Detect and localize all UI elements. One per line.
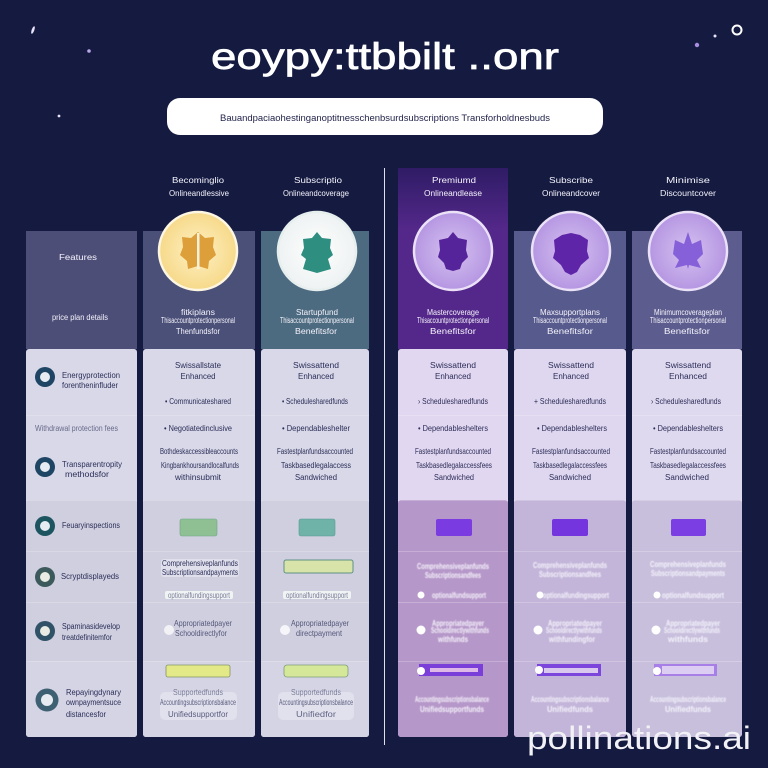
plan description: Thisaccountprotectionpersonal <box>650 316 726 325</box>
feature text: Kingbankhoursandlocalfunds <box>161 461 239 470</box>
feature text: Enhanced <box>298 372 334 381</box>
feature text: Swissattend <box>665 361 711 370</box>
column header band <box>514 231 626 349</box>
bullet note: Appropriatedpayer <box>291 619 349 628</box>
feature text: Enhanced <box>669 372 707 381</box>
soft text block: optionalfundsupport <box>662 591 724 600</box>
soft text block: Subscriptionsandpayments <box>651 569 725 578</box>
plan description <box>161 308 235 336</box>
blurred text: Supportedfunds <box>173 688 223 697</box>
blurred text <box>160 688 237 720</box>
row label 3: Transparentropity <box>62 460 122 469</box>
plan description: Benefitsfor <box>664 327 710 336</box>
column header band <box>261 231 369 349</box>
soft text block: Comprehensiveplanfunds <box>162 559 238 568</box>
violet badge <box>552 519 588 536</box>
plan description: Thisaccountprotectionpersonal <box>417 316 489 325</box>
feature text: • Schedulesharedfunds <box>282 397 348 406</box>
plan description: Benefitsfor <box>547 327 593 336</box>
blurred text: Accountingsubscriptionsbalance <box>160 698 236 707</box>
feature text: › Schedulesharedfunds <box>651 397 721 406</box>
row label 7: ownpaymentsuce <box>66 698 121 707</box>
panel: column 5 lilac <box>632 176 742 737</box>
soft text block: optionalfundsupport <box>432 591 486 600</box>
bullet note: withfunds <box>437 635 468 644</box>
feature text <box>160 361 239 482</box>
bullet note: Appropriatedpayer <box>174 619 232 628</box>
blurred text: Unifiedsupportfunds <box>420 705 484 714</box>
row label 2: Withdrawal protection fees <box>35 424 118 433</box>
subtitle pill <box>167 98 603 135</box>
column heading backdrop <box>398 168 508 231</box>
label column header: price plan details <box>52 313 108 322</box>
feature text: Bothdeskaccessibleaccounts <box>160 447 238 456</box>
blurred text <box>415 695 489 714</box>
blurred text <box>278 688 354 720</box>
feature text <box>277 361 353 482</box>
column cells <box>632 349 742 737</box>
label column header <box>26 231 137 349</box>
plan description <box>280 308 354 336</box>
soft text block: Comprehensiveplanfunds <box>533 561 607 570</box>
row label 1: forentheninfluder <box>62 381 118 390</box>
plan description: Benefitsfor <box>430 327 476 336</box>
icon: gold emblem <box>159 212 237 290</box>
icon: lilac emblem <box>649 212 727 290</box>
plan description: Thisaccountprotectionpersonal <box>280 316 354 325</box>
column cells <box>398 349 508 737</box>
bullet note: withfunds <box>667 635 709 644</box>
feature text: Sandwiched <box>549 473 591 482</box>
column heading <box>169 176 230 198</box>
feature text: • Communicateshared <box>165 397 231 406</box>
column heading: Onlineandlease <box>424 189 483 198</box>
feature text: Taskbasedlegalaccessfees <box>650 461 726 470</box>
progress bar with note: optionalfundingsupport <box>286 591 349 600</box>
icon: violet emblem <box>532 212 610 290</box>
progress bar <box>284 665 348 677</box>
teal badge <box>299 519 335 536</box>
plan description: fitkiplans <box>181 308 215 317</box>
bullet note <box>164 619 232 638</box>
feature text <box>532 361 610 482</box>
soft text block: Subscriptionsandfees <box>539 570 601 579</box>
blurred text: Accountingsubscriptionsbalance <box>279 698 353 707</box>
soft text block: Comprehensiveplanfunds <box>417 562 489 571</box>
soft text block <box>533 561 609 600</box>
plan description: Benefitsfor <box>295 327 337 336</box>
feature text: › Schedulesharedfunds <box>418 397 488 406</box>
row label 4: Feuaryinspections <box>62 521 120 530</box>
column heading <box>542 176 600 198</box>
feature text: • Dependableshelters <box>418 424 488 433</box>
blurred text: Accountingsubscriptionsbalance <box>415 695 489 704</box>
bullet note <box>280 619 349 638</box>
row label 1: Energyprotection <box>62 371 120 380</box>
vertical divider <box>384 168 385 745</box>
plan description: Minimumcoverageplan <box>654 308 722 317</box>
plan description: Thisaccountprotectionpersonal <box>533 316 607 325</box>
feature text: • Dependableshelter <box>282 424 350 433</box>
bullet note: Schooldirectlyfor <box>175 629 227 638</box>
bullet note: Schooldirectlywithfunds <box>664 626 720 635</box>
row label 6: Spaminasidevelop <box>62 622 120 631</box>
row label 7 <box>36 688 121 719</box>
watermark: pollinations.ai <box>527 720 751 756</box>
icon: violet emblem <box>414 212 492 290</box>
blurred text: Unifiedfor <box>296 710 336 719</box>
column heading <box>424 176 483 198</box>
violet badge <box>436 519 472 536</box>
bullet note <box>416 619 489 644</box>
feature text: • Negotiatedinclusive <box>164 424 232 433</box>
feature text: Sandwiched <box>665 473 709 482</box>
row label 3 <box>35 457 122 479</box>
bullet note <box>534 619 602 644</box>
bullet note: Appropriatedpayer <box>432 619 484 628</box>
column header band <box>398 231 508 349</box>
progress bar <box>653 664 717 676</box>
column heading: Onlineandcover <box>542 189 600 198</box>
green badge <box>180 519 217 536</box>
panel: column 3 deep violet <box>398 168 508 737</box>
plan description <box>417 308 489 336</box>
plan description: Thenfundsfor <box>176 327 220 336</box>
feature text: Fastestplanfundsaccounted <box>532 447 610 456</box>
column heading: Discountcover <box>660 189 716 198</box>
plan description: Startupfund <box>296 308 338 317</box>
feature text: + Schedulesharedfunds <box>534 397 606 406</box>
plan description <box>533 308 607 336</box>
feature text: withinsubmit <box>174 473 222 482</box>
feature text: Fastestplanfundsaccounted <box>277 447 353 456</box>
panel: column 4 violet <box>514 176 626 737</box>
column cells <box>514 349 626 737</box>
blurred text: Unifiedsupportfor <box>168 710 228 719</box>
column heading: Minimise <box>666 176 711 185</box>
feature text: Swissattend <box>293 361 339 370</box>
column heading <box>283 176 350 198</box>
soft text block <box>417 562 489 600</box>
blurred text: Unifiedfunds <box>547 705 594 714</box>
bullet note: withfundingfor <box>548 635 595 644</box>
plan description: Maxsupportplans <box>540 308 600 317</box>
plan description <box>650 308 726 336</box>
label column rows <box>26 349 137 737</box>
column header band <box>143 231 255 349</box>
blurred text: Unifiedfunds <box>665 705 712 714</box>
row label 6 <box>35 621 120 642</box>
feature text: Enhanced <box>180 372 216 381</box>
row label 5 <box>35 567 119 587</box>
bullet note: Schooldirectlywithfunds <box>431 626 489 635</box>
column cells <box>143 349 255 737</box>
column heading: Onlineandlessive <box>169 189 230 198</box>
plan description: Mastercoverage <box>427 308 479 317</box>
feature text: Taskbasedlegalaccessfees <box>416 461 492 470</box>
row label 7: Repayingdynary <box>66 688 121 697</box>
column heading: Subscriptio <box>294 176 343 185</box>
panel: label column <box>26 231 137 737</box>
progress bar <box>166 665 230 677</box>
bullet note <box>652 619 720 644</box>
feature text: Swissattend <box>548 361 594 370</box>
bullet note: Appropriatedpayer <box>666 619 720 628</box>
column heading: Becominglio <box>172 176 225 185</box>
panel: column 1 gold <box>143 176 255 737</box>
feature text: Fastestplanfundsaccounted <box>650 447 726 456</box>
row label 4 <box>35 516 120 536</box>
row label 6: treatdefinitemfor <box>62 633 112 642</box>
feature text: Sandwiched <box>434 473 474 482</box>
feature text: Taskbasedlegalaccessfees <box>533 461 607 470</box>
feature text: Enhanced <box>553 372 589 381</box>
soft text block: optionalfundingsupport <box>168 591 231 600</box>
bullet note: Appropriatedpayer <box>548 619 602 628</box>
feature text: Taskbasedlegalaccess <box>281 461 351 470</box>
soft text block <box>161 559 239 600</box>
feature text: Swissallstate <box>175 361 222 370</box>
violet badge <box>671 519 706 536</box>
progress bar <box>535 664 601 676</box>
row label 1 <box>35 367 120 390</box>
row label 5: Scryptdisplayeds <box>61 572 119 581</box>
feature text: • Dependableshelters <box>537 424 607 433</box>
panel: column 2 teal <box>261 176 369 737</box>
column heading: Premiumd <box>432 176 476 185</box>
soft text block: Subscriptionsandfees <box>425 571 481 580</box>
column cells <box>261 349 369 737</box>
feature text: Fastestplanfundsaccounted <box>415 447 491 456</box>
feature text: Sandwiched <box>295 473 337 482</box>
column heading <box>660 176 716 198</box>
soft text block: Subscriptionsandpayments <box>162 568 238 577</box>
decorative stars <box>30 26 741 117</box>
title: eoypy:ttbbilt ..onr <box>211 36 559 77</box>
bullet note: directpayment <box>296 629 343 638</box>
plan description: Thisaccountprotectionpersonal <box>161 316 235 325</box>
feature text: • Dependableshelters <box>653 424 723 433</box>
blurred text <box>531 695 609 714</box>
progress bar <box>417 664 483 676</box>
feature text: Swissattend <box>430 361 476 370</box>
column heading: Onlineandcoverage <box>283 189 350 198</box>
subtitle pill: Bauandpaciaohestinganoptitnesschenbsurdsubscriptions Transforholdnesbuds <box>220 113 551 123</box>
blurred text <box>650 695 726 714</box>
column header band <box>632 231 742 349</box>
soft text block <box>650 560 726 600</box>
blurred text: Supportedfunds <box>291 688 341 697</box>
feature text <box>650 361 726 482</box>
soft text block: optionalfundingsupport <box>543 591 609 600</box>
label column header: Features <box>59 253 97 262</box>
feature text: Enhanced <box>435 372 471 381</box>
progress bar with note <box>283 560 353 600</box>
blurred text: Accountingsubscriptionsbalance <box>531 695 609 704</box>
feature text <box>415 361 492 482</box>
bullet note: Schooldirectlywithfunds <box>546 626 602 635</box>
soft text block: Comprehensiveplanfunds <box>650 560 726 569</box>
column heading: Subscribe <box>549 176 594 185</box>
icon: teal emblem <box>278 212 356 290</box>
row label 7: distancesfor <box>66 710 106 719</box>
row label 3: methodsfor <box>65 470 109 479</box>
